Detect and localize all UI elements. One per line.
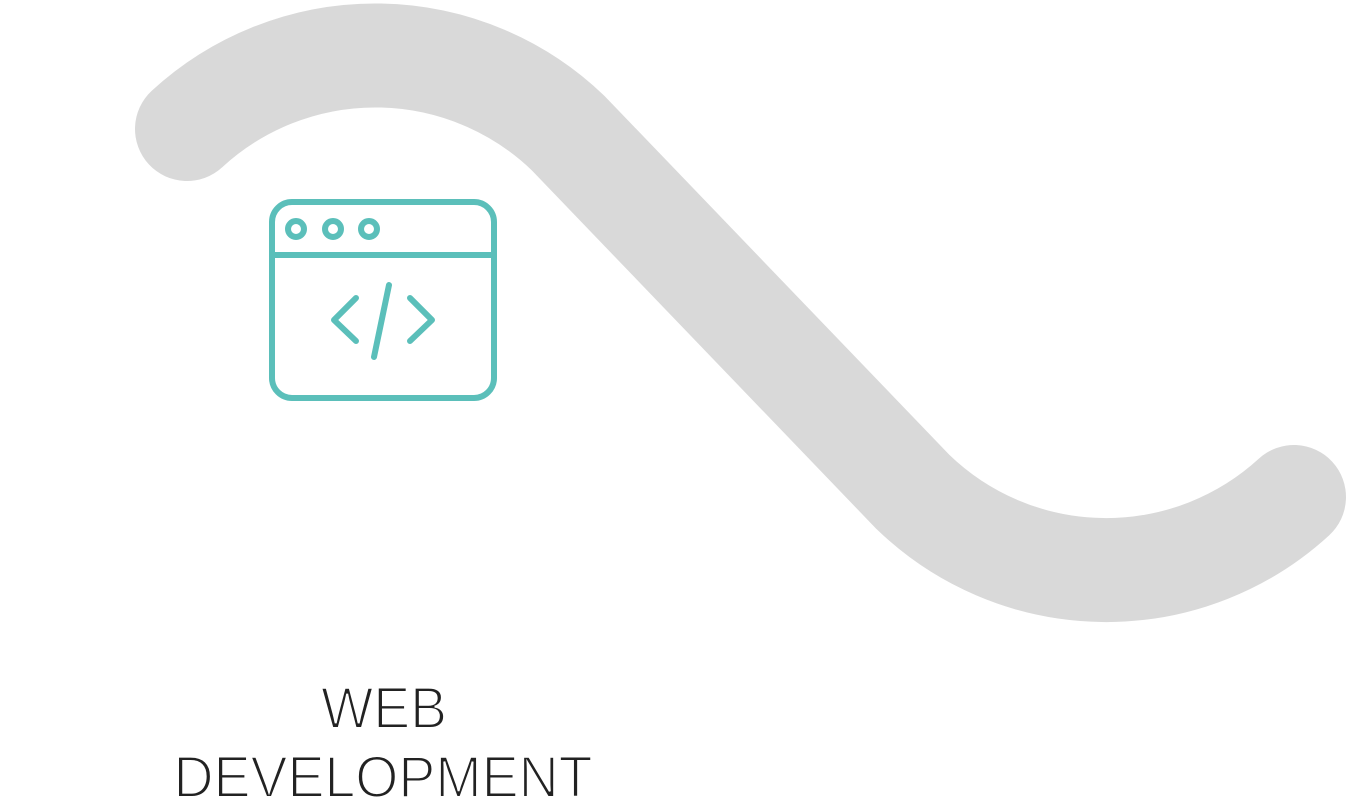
- title: web development: WEB: [321, 676, 447, 741]
- icon: browser code window: [272, 202, 494, 398]
- title: web development: [174, 676, 592, 808]
- grey wave path: [187, 55, 1294, 570]
